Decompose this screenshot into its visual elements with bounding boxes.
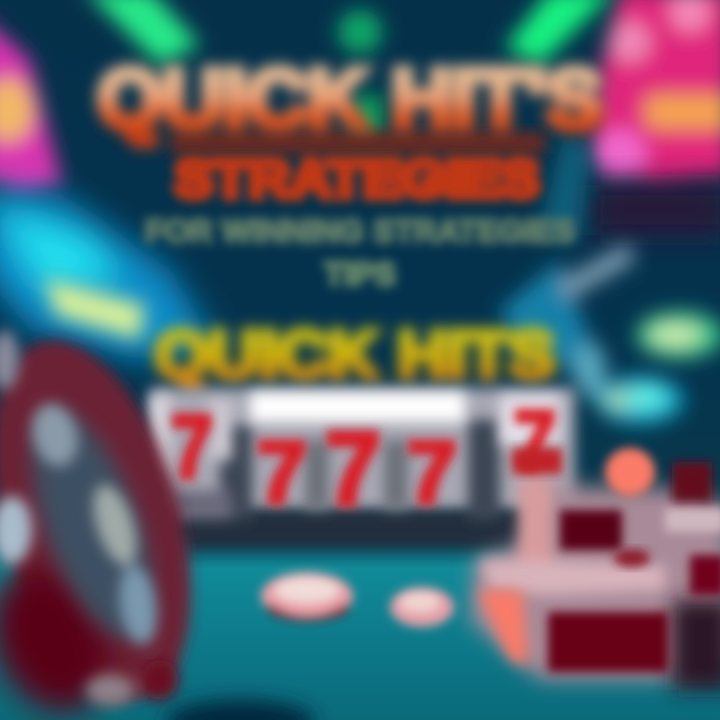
die: top pale band — [480, 560, 665, 595]
reel separators — [170, 420, 500, 520]
reel sevens: 7 — [257, 423, 307, 522]
title — [98, 52, 602, 393]
table chips — [261, 572, 454, 627]
die: glowing top — [605, 448, 655, 496]
die: pink pillar — [518, 478, 552, 573]
reel sevens: 7 — [407, 423, 457, 522]
dark maroon shade: right side — [590, 185, 720, 235]
die: right pale band — [665, 508, 720, 532]
slot machine body — [150, 388, 575, 513]
red top block — [512, 448, 562, 474]
glow: left cyan light — [0, 190, 215, 360]
reel sevens: 7 — [171, 398, 213, 498]
die: right maroon face — [690, 555, 720, 595]
slot machine — [150, 388, 575, 548]
die: grey body — [470, 485, 720, 680]
die: dark lower right — [672, 600, 720, 690]
die: upper maroon face — [560, 510, 622, 550]
die: orange left face — [478, 590, 528, 665]
left chip shadow — [165, 700, 315, 720]
slot machine base — [185, 510, 530, 548]
chip body — [0, 318, 228, 720]
glow: right side lights — [500, 130, 720, 424]
subheading: tips: TIPS — [324, 256, 396, 292]
reel sevens: 7 — [325, 411, 381, 528]
chip inner slate — [8, 397, 176, 653]
die: front maroon face — [548, 612, 668, 672]
chip: table right — [390, 587, 454, 627]
title shadow band — [170, 132, 545, 154]
top white highlights — [150, 392, 560, 475]
chip ring highlights — [0, 330, 178, 706]
poker chip: left — [0, 318, 228, 720]
subheading: for winning strategies: FOR WINNING STRATEGIES — [145, 213, 575, 249]
heading: Strategies: STRATEGIES — [174, 149, 540, 209]
heading: Quick Hits yellow: QUICK HITS — [155, 317, 555, 393]
chip: table centre — [261, 572, 353, 620]
glow: left yellow streak — [45, 278, 145, 340]
reel sevens: 7 — [514, 394, 556, 489]
glow: top right pink lights — [590, 0, 720, 185]
glow: top left magenta light — [0, 15, 62, 195]
chip dark lower edge — [0, 549, 132, 720]
green spotlight beams — [85, 0, 615, 137]
heading: Quick Hit's: QUICK HIT'S — [98, 52, 602, 146]
die: top right maroon — [672, 462, 712, 502]
dice: right stack — [470, 448, 720, 690]
reel sevens — [171, 394, 556, 528]
